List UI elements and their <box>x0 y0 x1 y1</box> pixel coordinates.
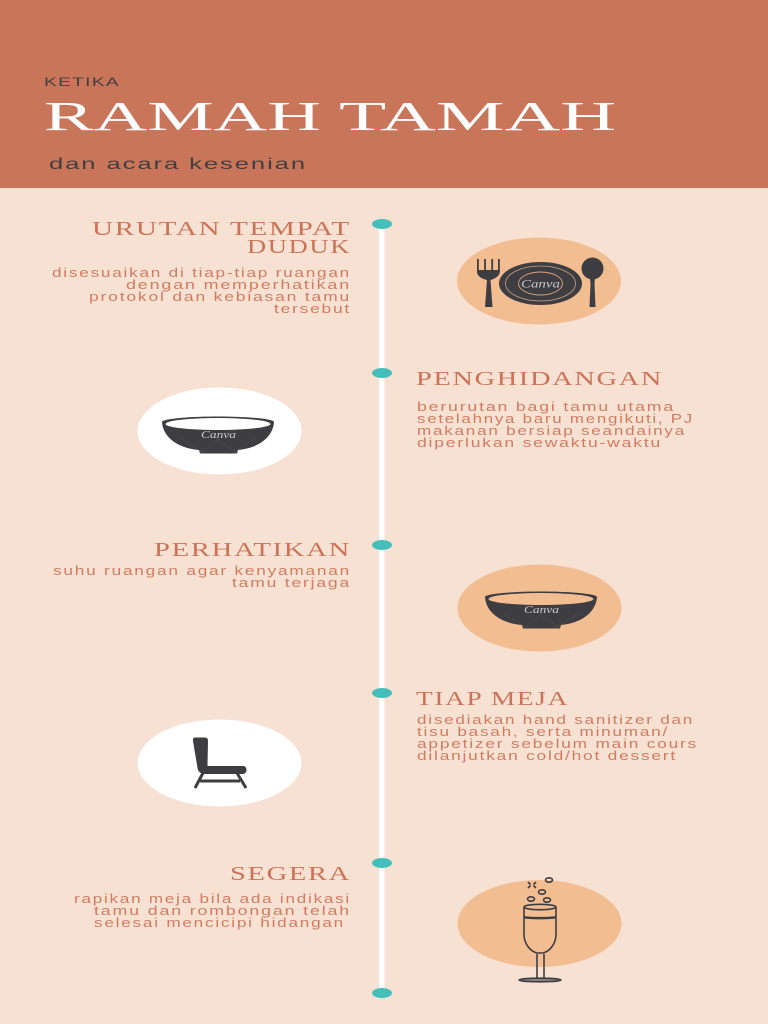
text block: perhatikan: tamu terjaga <box>232 576 351 590</box>
title <box>44 93 616 139</box>
icon: bowl on white: Canva <box>201 429 237 441</box>
title: TAMAH <box>339 93 616 139</box>
subtitle: dan acara kesenian <box>49 156 307 173</box>
icon: bowl on orange: Canva <box>524 604 560 616</box>
text block: penghidangan: berurutan bagi tamu utama <box>417 400 675 414</box>
icon: champagne glass <box>458 878 622 982</box>
text block: segera: rapikan meja bila ada indikasi <box>74 892 351 906</box>
text block: segera <box>74 864 351 930</box>
text block: segera: selesai mencicipi hidangan <box>94 916 345 930</box>
text block: penghidangan: makanan bersiap seandainya <box>417 424 686 438</box>
text block: urutan tempat duduk: dengan memperhatikan <box>126 278 351 292</box>
text block: segera: SEGERA <box>230 864 351 885</box>
icon: bowl on white <box>138 388 302 474</box>
icon: plate with fork and spoon <box>457 238 621 324</box>
text block: tiap meja: TIAP MEJA <box>416 689 569 710</box>
text block: penghidangan: diperlukan sewaktu-waktu <box>417 436 662 450</box>
text block: tiap meja: tisu basah, serta minuman/ <box>417 725 669 739</box>
timeline <box>372 219 392 998</box>
text block: penghidangan <box>416 369 694 450</box>
icon: plate with fork and spoon: Canva <box>521 276 560 290</box>
icon: chair <box>138 720 302 806</box>
text block: urutan tempat duduk: URUTAN TEMPAT <box>92 219 351 240</box>
text block: penghidangan: setelahnya baru mengikuti, PJ <box>417 412 694 426</box>
text block: segera: tamu dan rombongan telah <box>94 904 351 918</box>
title: RAMAH <box>44 93 321 139</box>
text block: urutan tempat duduk: DUDUK <box>247 237 351 258</box>
text block: tiap meja: dilanjutkan cold/hot dessert <box>417 749 677 763</box>
text block: tiap meja: disediakan hand sanitizer dan <box>417 713 694 727</box>
text block: perhatikan <box>53 540 351 590</box>
text block: tiap meja <box>416 689 698 763</box>
text block: urutan tempat duduk: disesuaikan di tiap-tiap ruangan <box>52 266 351 280</box>
text block: urutan tempat duduk: protokol dan kebiasan tamu <box>89 290 351 304</box>
text block: tiap meja: appetizer sebelum main cours <box>417 737 698 751</box>
eyebrow text: KETIKA <box>44 77 120 89</box>
text block: perhatikan: suhu ruangan agar kenyamanan <box>53 564 351 578</box>
text block: penghidangan: PENGHIDANGAN <box>416 369 663 390</box>
text block: perhatikan: PERHATIKAN <box>154 540 351 561</box>
header banner <box>0 0 768 188</box>
icon: bowl on orange <box>458 564 622 652</box>
text block: urutan tempat duduk: tersebut <box>274 302 351 316</box>
text block: urutan tempat duduk <box>52 219 351 316</box>
